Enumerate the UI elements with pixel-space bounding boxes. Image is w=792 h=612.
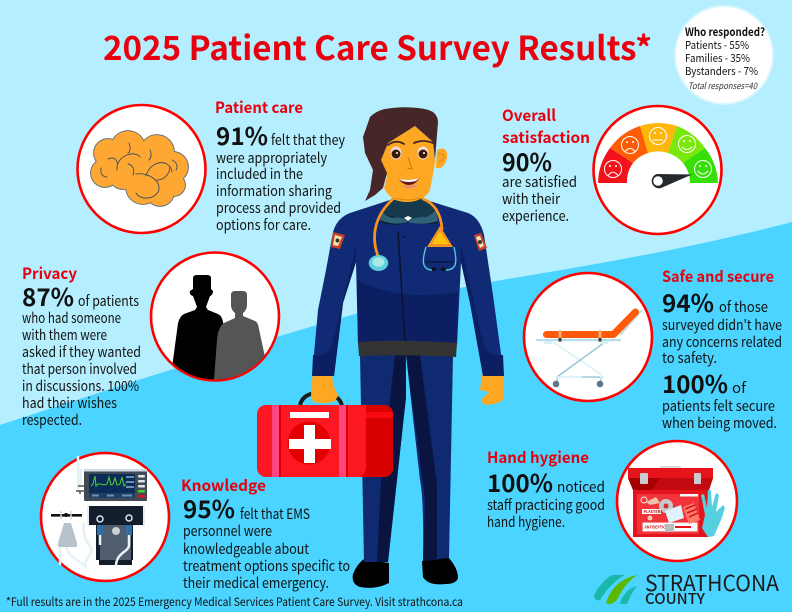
- text: hand hygiene: staff practicing good: [487, 495, 605, 515]
- belt: [358, 341, 457, 357]
- panel: privacy icon silhouettes: [151, 252, 279, 390]
- panel: who responded: Patients - 55%: [685, 37, 749, 53]
- text: knowledge: treatment options specific to: [183, 556, 350, 576]
- text: knowledge: personnel were: [183, 521, 272, 541]
- text: overall satisfaction: Overall: [502, 104, 556, 126]
- panel: who responded: Total responses=40: [688, 79, 758, 92]
- text: overall satisfaction: [502, 104, 590, 226]
- text: safe and secure: [662, 265, 782, 433]
- hands: [311, 375, 503, 404]
- text: patient care: options for care.: [216, 215, 311, 235]
- text: privacy: in discussions. 100%: [22, 376, 139, 396]
- medical bag: [257, 405, 393, 477]
- figure: paramedic: [257, 107, 504, 588]
- text: patient care: [215, 96, 346, 235]
- trousers: [360, 355, 453, 562]
- text: overall satisfaction: with their: [502, 189, 560, 209]
- panel: hand hygiene icon first aid kit and gloves: ANTISEPTIC: [644, 526, 666, 530]
- panel: patient care icon brain: [78, 105, 206, 233]
- text: privacy: 87%: [22, 279, 74, 314]
- text: safe and secure: patients felt secure: [662, 396, 775, 416]
- shoes: [353, 557, 458, 588]
- collar: [380, 198, 438, 225]
- text: hand hygiene: [487, 446, 605, 532]
- text: patient care: felt that they: [271, 130, 346, 150]
- text: privacy: asked if they wanted: [22, 342, 141, 362]
- icon: satisfaction gauge: [594, 106, 722, 234]
- panel: who responded: [675, 6, 773, 104]
- text: hand hygiene: Hand hygiene: [487, 446, 589, 468]
- logo: Strathcona County: STRATHCONA: [645, 566, 780, 598]
- logo: Strathcona County: [594, 566, 780, 609]
- text: privacy: of patients: [78, 291, 139, 311]
- hand over bag handle: [311, 376, 338, 403]
- panel: hand hygiene icon first aid kit and gloves: PLASTERS: [644, 510, 663, 515]
- bag handle: [300, 392, 342, 405]
- text: patient care: included in the: [216, 164, 303, 184]
- text: safe and secure: of those: [719, 297, 768, 317]
- text: safe and secure: 94%: [662, 285, 714, 320]
- text: safe and secure: Safe and secure: [662, 265, 774, 287]
- text: privacy: had their wishes: [22, 393, 117, 413]
- text: overall satisfaction: are satisfied: [502, 172, 577, 192]
- text: privacy: respected.: [22, 410, 82, 430]
- text: privacy: Privacy: [22, 262, 77, 284]
- text: patient care: process and provided: [216, 198, 341, 218]
- text: safe and secure: of: [732, 378, 747, 398]
- text: knowledge: 95%: [183, 491, 235, 526]
- panel: knowledge icon medical monitor: [41, 453, 169, 581]
- text: patient care: information sharing: [216, 181, 332, 201]
- title: 2025 Patient Care Survey Results*: [103, 22, 652, 70]
- text: patient care: were appropriately: [216, 148, 328, 168]
- text: patient care: 91%: [216, 118, 268, 153]
- panel: who responded: Families - 35%: [685, 50, 750, 66]
- panel: who responded: Bystanders - 7%: [685, 63, 758, 79]
- panel: hand hygiene icon first aid kit and gloves: [617, 441, 737, 561]
- text: safe and secure: when being moved.: [662, 413, 777, 433]
- text: privacy: with them were: [22, 325, 107, 345]
- panel: safe and secure icon stretcher: [524, 273, 652, 401]
- text: privacy: [22, 262, 141, 430]
- jacket: [312, 199, 504, 376]
- text: knowledge: their medical emergency.: [183, 573, 329, 593]
- text: overall satisfaction: experience.: [502, 206, 569, 226]
- footnote: *Full results are in the 2025 Emergency Medical Services Patient Care Survey. Visit strathcona.ca: [6, 594, 463, 610]
- text: knowledge: [181, 474, 350, 593]
- text: hand hygiene: noticed: [557, 477, 605, 497]
- text: knowledge: felt that EMS: [240, 504, 310, 524]
- text: patient care: Patient care: [215, 96, 303, 118]
- text: overall satisfaction: satisfaction: [502, 126, 590, 148]
- text: hand hygiene: 100%: [487, 465, 553, 500]
- head: [363, 107, 447, 202]
- text: knowledge: Knowledge: [181, 474, 266, 496]
- text: privacy: who had someone: [22, 308, 121, 328]
- text: hand hygiene: hand hygiene.: [487, 512, 565, 532]
- logo: Strathcona County: COUNTY: [645, 588, 706, 609]
- shoulder patches: [331, 232, 487, 251]
- text: overall satisfaction: 90%: [502, 144, 552, 179]
- text: privacy: that person involved: [22, 359, 137, 379]
- stethoscope: [369, 199, 456, 271]
- text: safe and secure: to safety.: [662, 348, 717, 368]
- panel: who responded: Who responded?: [685, 24, 765, 40]
- text: knowledge: knowledgeable about: [183, 539, 310, 559]
- text: safe and secure: 100%: [662, 366, 728, 401]
